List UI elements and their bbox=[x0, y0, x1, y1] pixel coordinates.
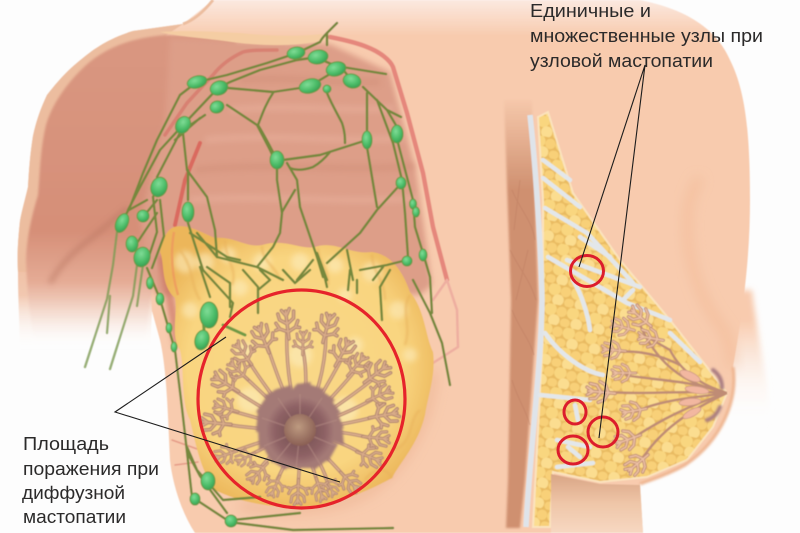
red blood vessels bbox=[165, 37, 458, 465]
breast ducts section bbox=[605, 325, 727, 462]
leader lines left bbox=[115, 337, 340, 482]
orange vessel over fat bbox=[172, 232, 178, 295]
collarbone bbox=[160, 31, 326, 45]
shoulder and upper skin band bbox=[18, 24, 183, 272]
areola with radiating petals bbox=[256, 382, 344, 470]
lactiferous sinuses bbox=[678, 368, 709, 421]
muscle strip texture bbox=[510, 180, 536, 425]
label: nodular mastopathy bbox=[530, 1, 763, 71]
leader lines right bbox=[579, 65, 645, 438]
left breast fat highlights bbox=[174, 247, 417, 423]
soft shadow under the left breast fat bbox=[240, 370, 433, 510]
label: diffuse mastopathy: поражения при bbox=[23, 459, 159, 479]
left breast glandular fat bbox=[160, 226, 434, 507]
label: diffuse mastopathy: Площадь bbox=[23, 434, 109, 454]
label: diffuse mastopathy: мастопатии bbox=[23, 507, 126, 527]
red shade beside fat, under the armpit bbox=[162, 255, 178, 345]
pectoral muscle bbox=[140, 38, 432, 295]
red circle: area of diffuse mastopathy bbox=[198, 290, 405, 508]
mammary ducts left bbox=[223, 330, 378, 486]
breast rim shading bbox=[640, 367, 734, 484]
body silhouette: torso skin bbox=[140, 0, 750, 533]
red circles: nodular mastopathy sites bbox=[558, 256, 618, 464]
right side skin fading to white bbox=[715, 290, 772, 430]
nipple in profile shading bbox=[707, 370, 722, 420]
arm crease shadow bbox=[50, 208, 128, 283]
suspensory ligaments bbox=[540, 160, 700, 467]
pectoral muscle stripes bbox=[190, 79, 420, 200]
left breast fat shadow lines bbox=[180, 240, 420, 480]
mammary lobules left bbox=[200, 308, 401, 505]
deltoid and arm muscle bbox=[26, 35, 240, 345]
nipple bbox=[284, 414, 316, 446]
lymph nodes bbox=[112, 46, 427, 527]
label: nodular mastopathy: Единичные и bbox=[530, 1, 651, 21]
neck edge line bbox=[183, 0, 213, 24]
label: diffuse mastopathy bbox=[22, 434, 159, 527]
label: nodular mastopathy: узловой мастопатии bbox=[530, 51, 713, 71]
breast lobules section bbox=[586, 301, 665, 480]
fascia white stripe bbox=[526, 115, 542, 527]
breast fold shadow bbox=[687, 178, 732, 367]
left arm skin fading to white bbox=[18, 24, 183, 350]
under-breast area bbox=[551, 474, 643, 533]
chest wall muscle strip, section view bbox=[504, 100, 538, 528]
label: nodular mastopathy: множественные узлы при bbox=[530, 26, 763, 46]
breast fat section bbox=[533, 112, 727, 527]
lymph vessels network bbox=[122, 23, 450, 530]
label: diffuse mastopathy: диффузной bbox=[22, 483, 125, 503]
lymph vessels fading on arm bbox=[85, 232, 143, 369]
